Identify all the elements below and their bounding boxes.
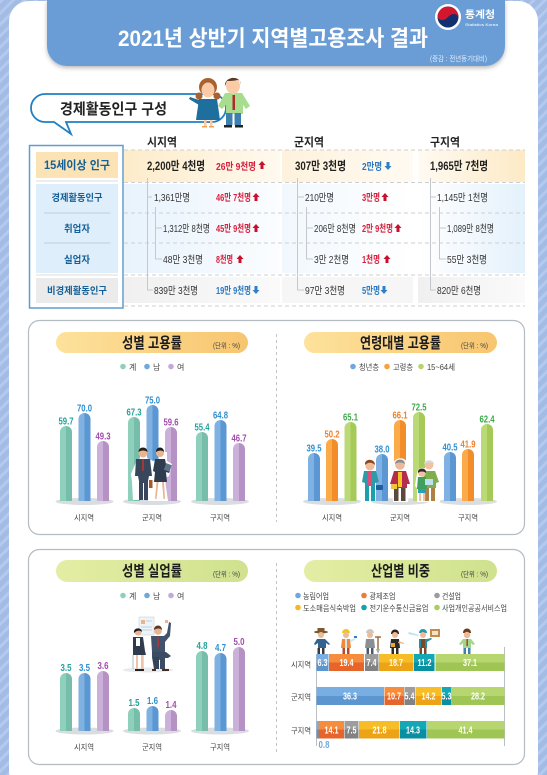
value labels: 1.5 <box>128 698 140 709</box>
legend: 전기운수통신금융업 <box>370 603 428 613</box>
icon: statistics korea logo <box>435 4 499 30</box>
heading: 성별 실업률 <box>122 563 182 580</box>
column: si region: 48만 3천명 <box>163 254 203 266</box>
chart: industry share <box>291 560 507 751</box>
value labels: 67.3 <box>126 408 142 418</box>
category labels <box>74 742 230 752</box>
legend: 도소매음식숙박업 <box>303 603 356 613</box>
column: gu region: 1,145만 1천명 <box>437 192 488 204</box>
icon: job seekers seated with resume <box>123 617 173 672</box>
stacked bar: gu region <box>316 721 504 738</box>
column: gun region: 206만 8천명 <box>314 223 356 235</box>
row header box <box>30 146 123 308</box>
category labels: 구지역 <box>458 512 478 522</box>
row labels: 군지역 <box>291 692 311 702</box>
column: gu region <box>430 159 494 297</box>
heading: (단위 : %) <box>213 341 240 350</box>
heading <box>56 560 248 582</box>
stacked bar: si region: 7.4 <box>366 658 377 669</box>
column heads: 구지역 <box>430 136 460 149</box>
callout: 0.8 label: 0.8 <box>318 739 330 751</box>
legend: 사업개인공공서비스업 <box>442 603 507 613</box>
row header box: 비경제활동인구 <box>47 285 107 297</box>
value labels: 72.5 <box>412 402 427 414</box>
heading: 성별 고용률 <box>122 335 182 352</box>
heading <box>56 332 248 353</box>
chart: employment rate by age <box>303 332 497 522</box>
heading: (단위 : %) <box>213 570 240 578</box>
column: si region: 26만 9천명 <box>216 160 256 173</box>
stacked bar: gun region <box>316 687 504 705</box>
stacked bar: gun region: 28.2 <box>471 692 485 702</box>
row labels: 시지역 <box>291 660 311 670</box>
stacked bar: gu region: 14.3 <box>406 726 420 736</box>
legend: 15~64세 <box>427 363 455 372</box>
column: si region: 1,312만 8천명 <box>163 223 210 235</box>
section heading bubble: 경제활동인구 구성 <box>60 101 167 118</box>
category labels: 구지역 <box>210 742 230 752</box>
column: gu region: 55만 3천명 <box>447 254 487 266</box>
legend: 여 <box>177 591 184 601</box>
column: si region: 839만 3천명 <box>154 285 198 297</box>
legend <box>120 591 184 601</box>
value labels: 39.5 <box>306 444 322 454</box>
legend: 여 <box>177 362 184 372</box>
stacked bar: si region: 19.4 <box>340 658 354 669</box>
legend <box>295 591 507 613</box>
column: gun region: 5만명 <box>362 285 380 297</box>
stacked bar: si region: 37.1 <box>463 658 477 669</box>
value labels: 55.4 <box>194 422 210 434</box>
stacked bar: gun region: 36.3 <box>343 692 357 702</box>
heading: 산업별 비중 <box>371 563 430 580</box>
row labels: 구지역 <box>291 726 311 736</box>
column: si region: 19만 9천명 <box>216 284 251 297</box>
stacked bar: gun region: 10.7 <box>387 692 401 702</box>
icons: workers by industry <box>314 628 475 654</box>
legend: 청년층 <box>359 362 379 372</box>
value labels: 41.9 <box>460 440 476 450</box>
icon: farmer <box>314 628 330 654</box>
legend: 남 <box>153 592 161 601</box>
column: gun region: 2만 9천명 <box>362 222 393 235</box>
stacked bar: si region: 18.7 <box>389 658 403 669</box>
icon: factory worker <box>341 629 357 654</box>
title: 2021년 상반기 지역별고용조사 결과 <box>118 26 428 51</box>
value labels: 62.4 <box>480 414 495 426</box>
column: gun region: 210만명 <box>305 192 334 204</box>
category labels: 군지역 <box>142 512 162 522</box>
row header box: 경제활동인구 <box>52 192 103 204</box>
value labels: 40.5 <box>442 442 458 454</box>
legend <box>350 362 455 372</box>
value labels: 59.6 <box>164 418 179 428</box>
heading <box>304 560 497 582</box>
legend: 계 <box>129 591 136 601</box>
value labels: 3.5 <box>60 663 72 674</box>
column: si region: 2,200만 4천명 <box>147 159 205 173</box>
category labels: 군지역 <box>390 512 410 522</box>
bars <box>56 647 249 734</box>
category labels: 시지역 <box>74 512 94 522</box>
section heading bubble <box>31 94 226 134</box>
column heads <box>147 136 460 149</box>
value labels: 50.2 <box>324 430 340 440</box>
column: gun region: 307만 3천명 <box>295 159 346 173</box>
category labels: 시지역 <box>322 512 342 522</box>
value labels <box>58 396 247 444</box>
value labels: 1.4 <box>166 700 177 711</box>
stacked bar: si region: 11.2 <box>418 658 432 669</box>
icon: statistics korea logo: Statistics Korea <box>465 22 499 27</box>
icon: statistics korea logo: 통계청 <box>465 8 495 21</box>
column heads: 군지역 <box>294 136 324 149</box>
column: gun region: 2만명 <box>362 161 382 173</box>
row header box: 취업자 <box>64 223 90 235</box>
value labels: 66.1 <box>392 410 408 422</box>
heading: (단위 : %) <box>461 570 488 578</box>
chart: employment rate by sex <box>56 332 249 522</box>
column: gun region: 97만 3천명 <box>305 285 345 297</box>
legend <box>120 362 184 372</box>
panel: employment rates <box>28 320 524 534</box>
row bands <box>124 150 525 306</box>
stacked bar: gu region: 21.8 <box>372 726 387 736</box>
column: si region: 45만 9천명 <box>216 222 251 235</box>
value labels: 38.0 <box>374 444 390 456</box>
panel: unemployment and industry <box>28 550 524 764</box>
legend: 고령층 <box>393 363 413 372</box>
category labels: 시지역 <box>74 742 94 752</box>
stacked bar: gu region: 14.1 <box>324 726 339 736</box>
icon: construction worker <box>365 629 381 654</box>
axis lines <box>316 647 504 746</box>
icon: shop worker <box>390 630 404 654</box>
value labels <box>306 402 495 456</box>
stacked bar: gun region: 5.4 <box>404 692 415 702</box>
column: si region <box>147 159 266 297</box>
icon: boy with bag <box>362 460 383 501</box>
value labels: 1.6 <box>147 696 158 707</box>
stacked bar: gun region: 14.2 <box>422 692 436 702</box>
value labels: 49.3 <box>96 432 111 442</box>
value labels: 4.7 <box>215 643 226 654</box>
icon: two office people <box>189 78 250 128</box>
stacked bar: gu region: 7.5 <box>346 726 357 736</box>
value labels: 59.7 <box>58 416 74 428</box>
value labels: 3.5 <box>79 663 90 674</box>
chart: unemployment rate by sex <box>56 560 249 752</box>
header banner <box>47 0 505 66</box>
row header box: 15세이상 인구 <box>44 159 110 172</box>
icon: office worker <box>459 628 475 654</box>
value labels: 70.0 <box>77 404 92 414</box>
value labels <box>60 637 245 711</box>
category labels: 군지역 <box>142 742 162 752</box>
value labels: 5.0 <box>234 637 245 648</box>
category labels: 구지역 <box>210 512 230 522</box>
column: gun region: 3만 2천명 <box>314 254 349 266</box>
tree connector lines <box>148 178 446 290</box>
column: gu region: 1,965만 7천명 <box>430 159 488 173</box>
stacked bar: si region: 6.3 <box>318 658 328 669</box>
column: gu region: 820만 6천명 <box>437 285 481 297</box>
value labels: 46.7 <box>232 434 247 444</box>
column: gu region: 1,089만 8천명 <box>447 223 494 235</box>
column: si region: 1,361만명 <box>154 192 190 204</box>
heading <box>304 332 497 353</box>
bars <box>303 412 497 505</box>
legend: 남 <box>153 363 161 372</box>
panel: population table <box>30 136 525 308</box>
stacked bar: si region <box>316 654 504 671</box>
row header box: 실업자 <box>64 254 90 266</box>
column: gun region: 1천명 <box>362 253 380 266</box>
legend: 광제조업 <box>370 591 396 601</box>
icon: girl and grandfather with laptop <box>415 460 444 502</box>
heading: (단위 : %) <box>461 341 488 350</box>
row labels <box>291 660 311 736</box>
legend: 농림어업 <box>303 591 329 601</box>
column: gun region <box>295 159 402 297</box>
category labels <box>74 512 230 522</box>
category labels <box>322 512 478 522</box>
value labels: 3.6 <box>98 661 109 672</box>
legend: 건설업 <box>442 591 461 601</box>
column: gun region: 3만명 <box>362 192 380 204</box>
column: si region: 8천명 <box>216 253 233 266</box>
column heads: 시지역 <box>147 136 177 149</box>
unit note: (증감 : 전년동기대비) <box>430 54 487 63</box>
stacked bar: gu region: 41.4 <box>458 726 473 736</box>
legend: 계 <box>129 362 136 372</box>
value labels: 65.1 <box>343 412 358 424</box>
icon: delivery worker <box>408 629 440 654</box>
stacked bar: gun region: 5.3 <box>442 692 452 702</box>
value labels: 64.8 <box>213 410 228 422</box>
column: si region: 46만 7천명 <box>216 191 251 204</box>
heading: 연령대별 고용률 <box>360 335 441 352</box>
icon: business man and woman <box>131 448 172 501</box>
value labels: 4.8 <box>196 641 208 652</box>
bars <box>56 405 249 505</box>
value labels: 75.0 <box>145 396 160 406</box>
icon: older man in vest <box>389 458 412 502</box>
